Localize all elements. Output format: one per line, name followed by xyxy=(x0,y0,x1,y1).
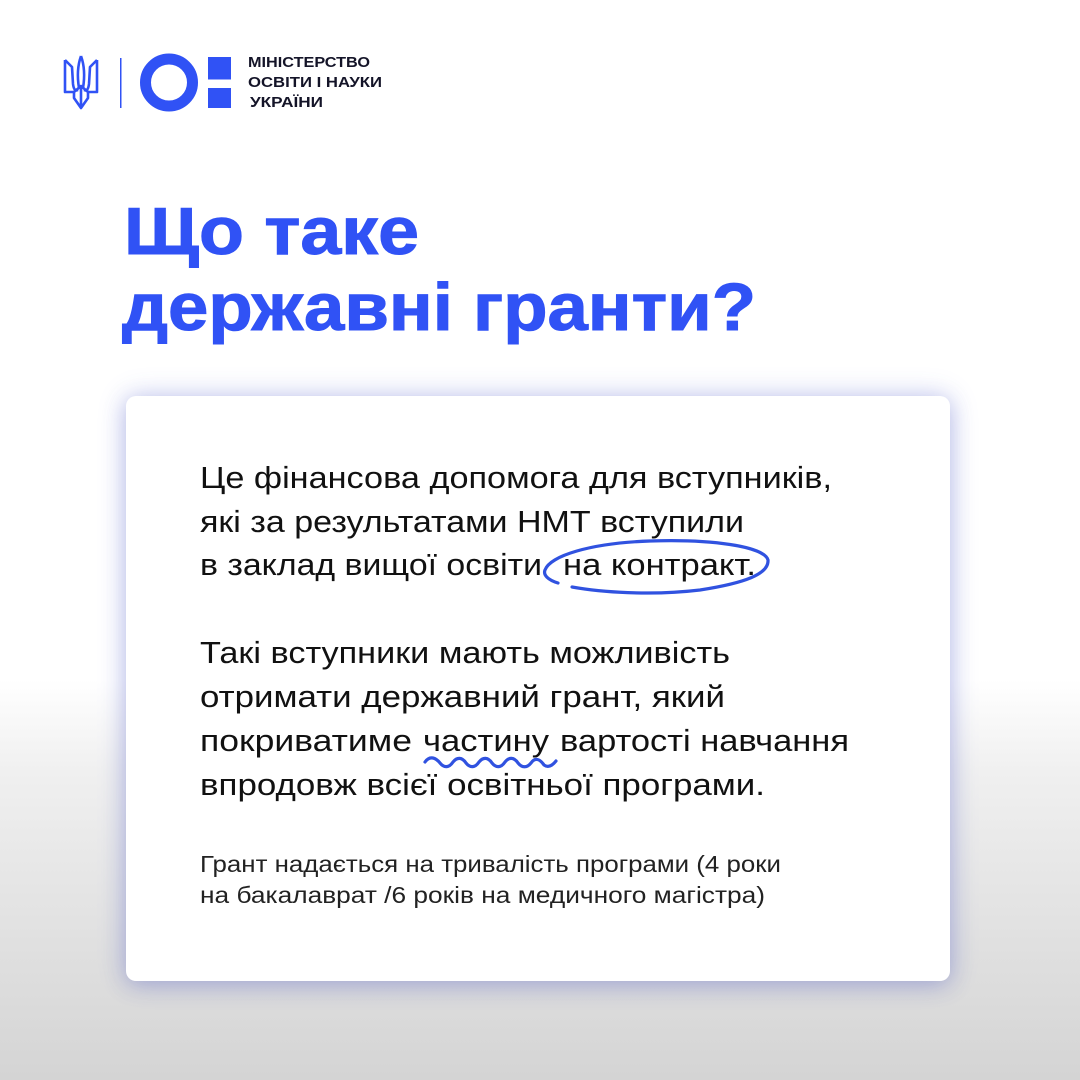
logo text: МІНІСТЕРСТВО xyxy=(248,55,370,71)
title xyxy=(122,194,756,345)
wavy underline under "частину" xyxy=(425,758,556,767)
icon: lower square xyxy=(208,88,231,108)
text block: definition: в заклад вищої освіти xyxy=(200,547,542,582)
panel: white card xyxy=(126,396,950,981)
text block: definition xyxy=(200,460,832,582)
icon: ring xyxy=(146,59,192,106)
text block: grant duration note xyxy=(200,851,781,908)
text block: definition: які за результатами НМТ вступили xyxy=(200,504,744,539)
logo text: УКРАЇНИ xyxy=(250,94,323,111)
text block: grant explanation: вартості навчання xyxy=(560,723,849,758)
icon: upper square xyxy=(208,57,231,80)
text block: grant explanation: впродовж всієї освітньої програми. xyxy=(200,767,765,802)
text block: definition: на контракт. xyxy=(563,547,756,582)
title: державні гранти? xyxy=(122,270,756,345)
text block: grant duration note: на бакалаврат /6 років на медичного магістра) xyxy=(200,882,765,908)
text block: grant explanation: частину xyxy=(423,723,550,758)
text block: grant explanation: отримати державний грант, який xyxy=(200,679,725,714)
title: Що таке xyxy=(124,194,419,269)
text block: definition: Це фінансова допомога для вступників, xyxy=(200,460,832,495)
text block: grant explanation xyxy=(200,635,849,802)
logo text: ОСВІТИ І НАУКИ xyxy=(248,75,382,91)
icon: trident xyxy=(65,56,97,108)
logo text xyxy=(248,55,382,111)
logo: ministry of education xyxy=(65,55,382,111)
text block: grant duration note: Грант надається на тривалість програми (4 роки xyxy=(200,851,781,877)
text block: grant explanation: покриватиме xyxy=(200,723,412,758)
hand-drawn ellipse around "на контракт." xyxy=(545,541,768,593)
divider line xyxy=(120,58,122,108)
text block: grant explanation: Такі вступники мають можливість xyxy=(200,635,730,670)
